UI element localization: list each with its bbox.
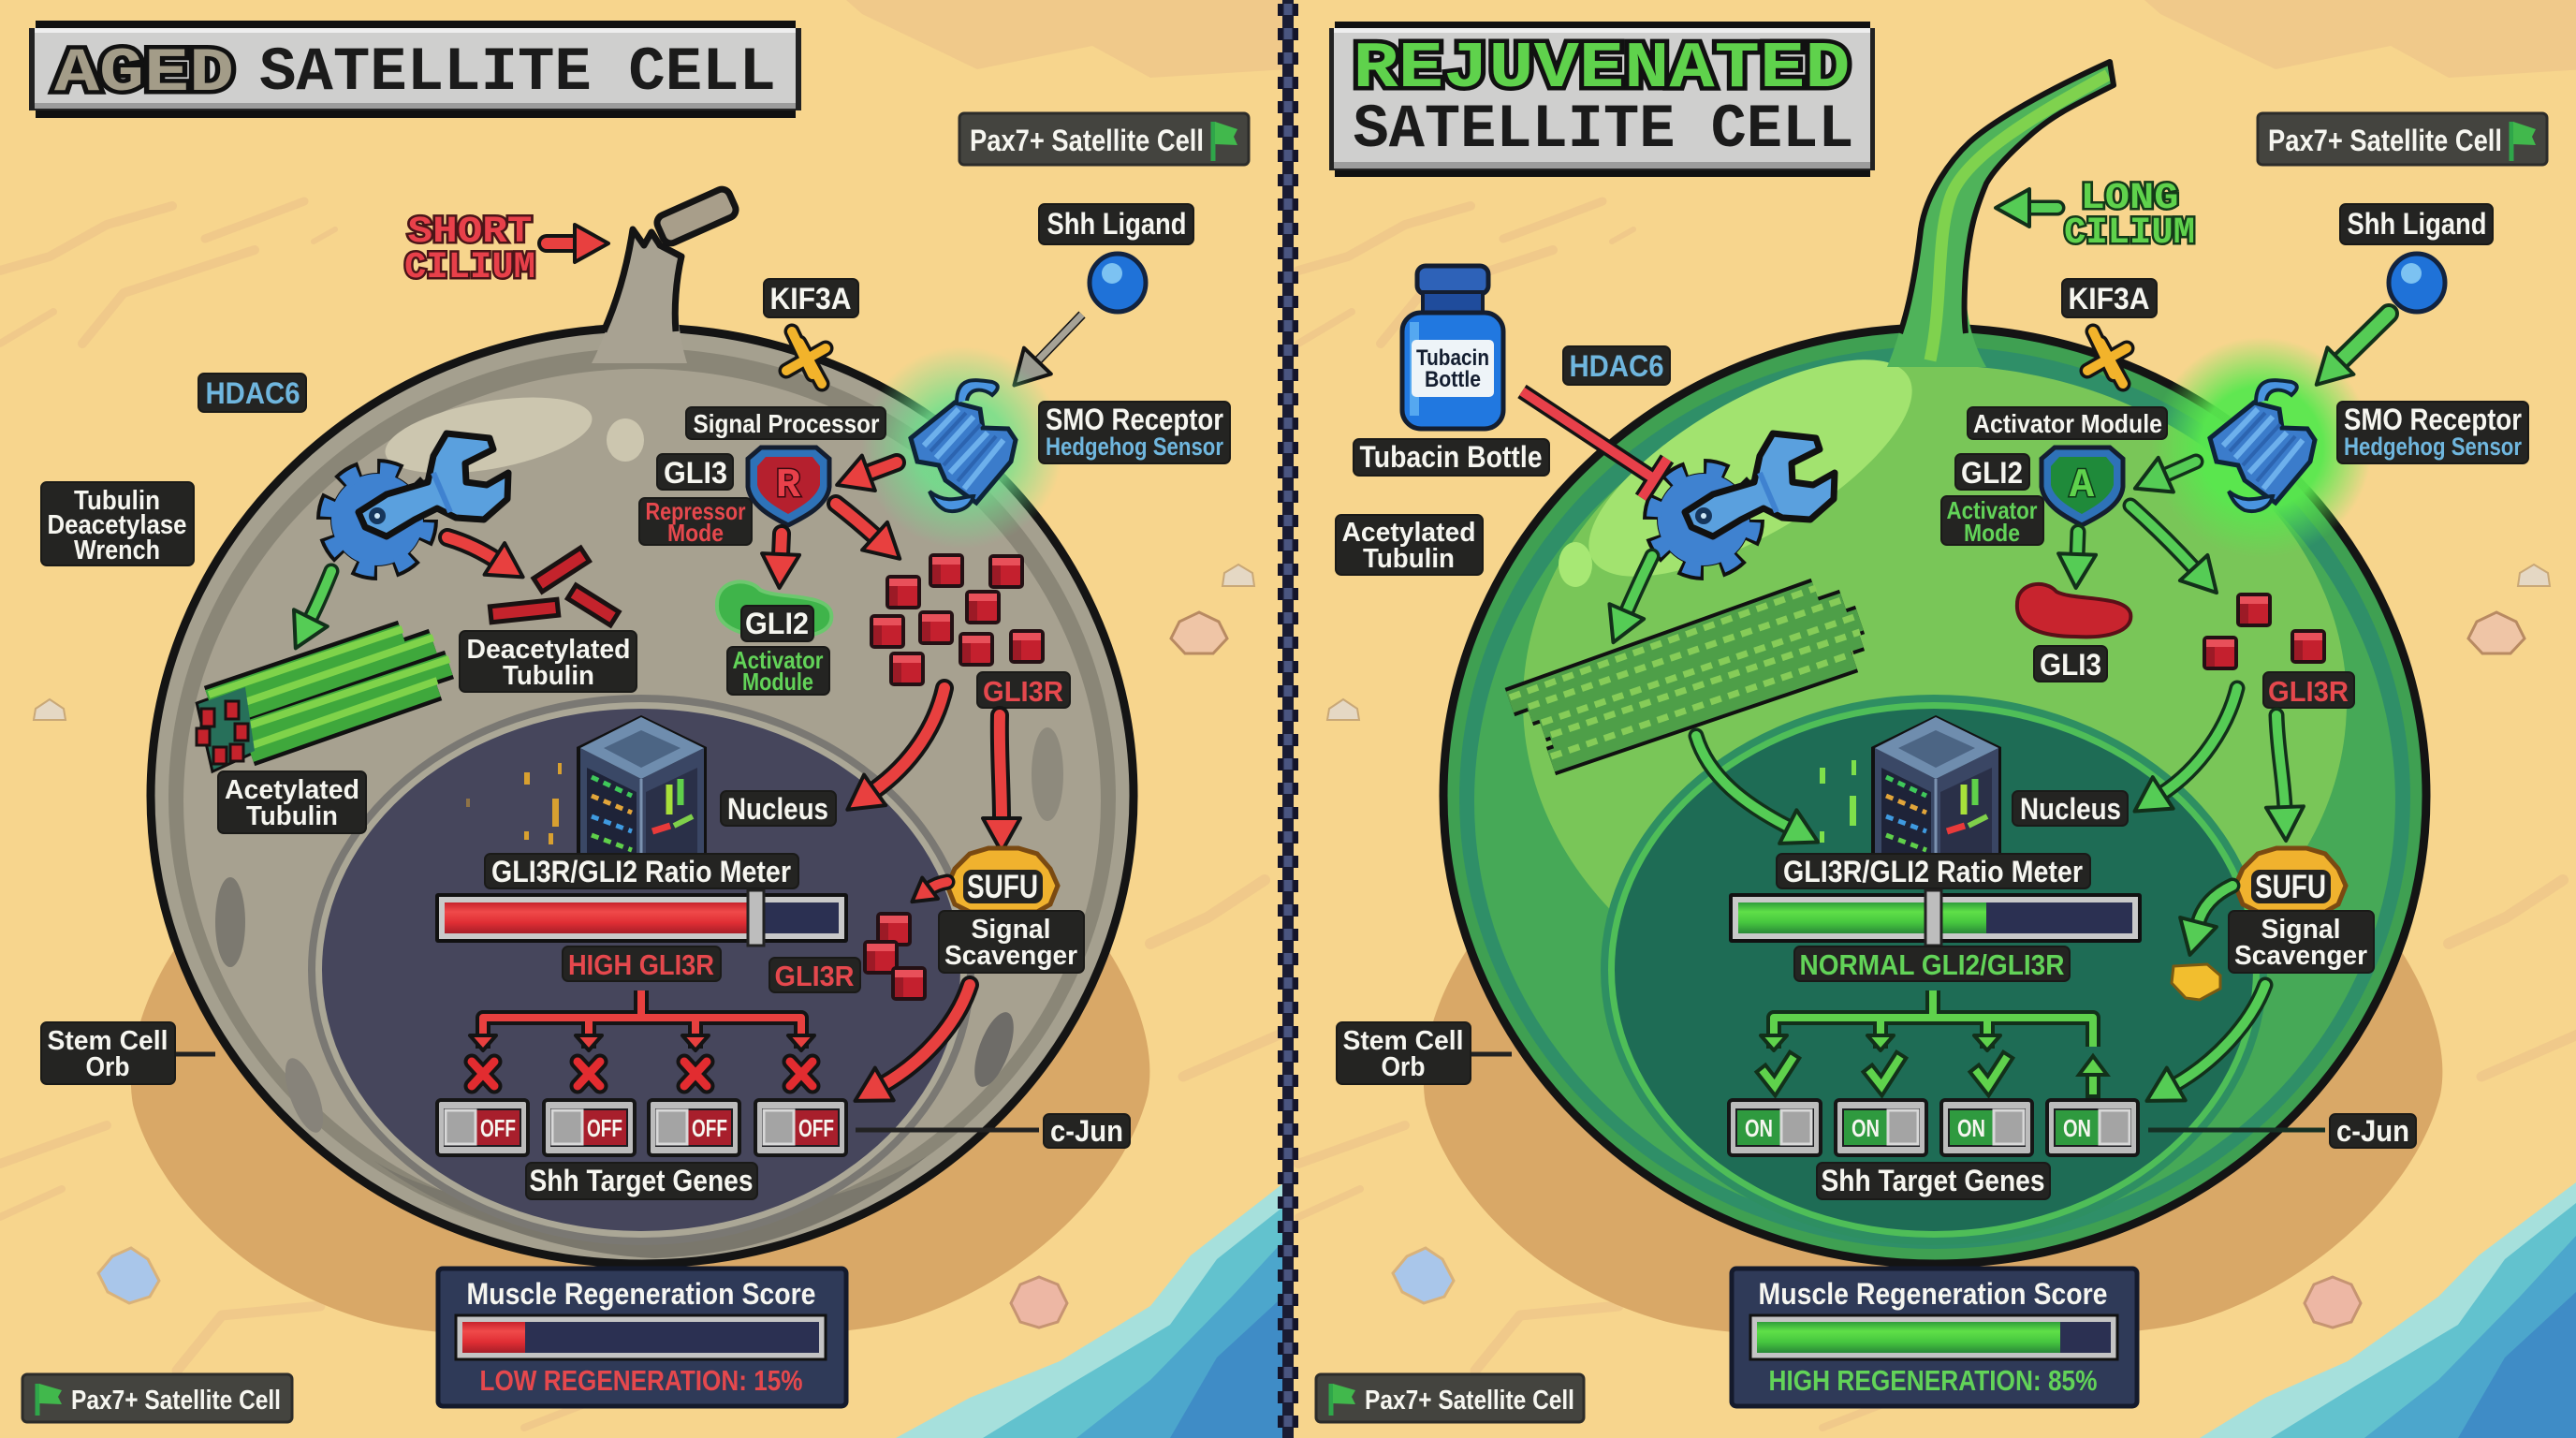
activator mode label: Mode [1964, 519, 2020, 547]
arrow: wrench to acetylated bundle [1626, 556, 1652, 613]
arrow: GLI3R to nucleus [873, 688, 944, 791]
branching repressor arrows [470, 990, 814, 1050]
cell shadow [131, 899, 1149, 1341]
SMO receptor label [1039, 402, 1230, 463]
Pax7 badge bottom: Pax7+ Satellite Cell [71, 1386, 281, 1416]
deacetylated tubulin label [460, 631, 637, 692]
GLI2 label: GLI2 [1961, 456, 2023, 490]
icon: activator shield: A [2070, 462, 2095, 509]
short cilium label: SHORT [408, 212, 532, 254]
shells on sand [1327, 565, 2550, 1328]
c-Jun leader and label: c-Jun [1050, 1114, 1123, 1148]
acetylated tubulin label: Tubulin [1363, 544, 1455, 574]
activator module label [727, 646, 829, 696]
long cilium [1887, 62, 2114, 367]
gene switch ON 3: ON [1957, 1114, 1985, 1142]
nucleus [308, 695, 974, 1245]
arrow: ligand to receptor [2339, 314, 2389, 362]
gene switch OFF 4 [755, 1100, 846, 1155]
captured GLI3R cubes [865, 914, 925, 999]
arrow: SUFU to gold blob [2198, 886, 2232, 924]
deacetylated tubulin label: Deacetylated [466, 635, 631, 665]
SMO receptor label: SMO Receptor [2344, 403, 2522, 436]
Pax7 badge bottom: Pax7+ Satellite Cell [1365, 1386, 1574, 1416]
Shh ligand label: Shh Ligand [2348, 207, 2486, 241]
SMO receptor label: SMO Receptor [1046, 403, 1223, 436]
GLI3R repressor cubes [871, 555, 1043, 684]
high GLI3R status: HIGH GLI3R [568, 948, 714, 981]
tubulin deacetylase wrench label: Tubulin [74, 486, 160, 516]
SMO receptor label [2337, 402, 2528, 463]
icon: SMO receptor glow [2151, 337, 2372, 558]
panel: rejuvenated satellite cell [1316, 22, 2550, 1422]
stem cell orb label: Orb [1382, 1052, 1425, 1082]
gene switch ON 1: ON [1745, 1114, 1773, 1142]
icon: activator shield [2042, 448, 2123, 525]
tubacin bottle label: Tubacin Bottle [1359, 440, 1543, 474]
signal scavenger label: Signal [972, 915, 1050, 945]
title: aged satellite cell [29, 21, 801, 118]
icon: nucleus server tower [1871, 715, 2001, 856]
GLI3R label: GLI3R [2268, 675, 2349, 708]
muscle regeneration score panel: high: Muscle Regeneration Score [1758, 1277, 2108, 1311]
acetylated tubulin label: Acetylated [225, 775, 359, 805]
cell shadow [1424, 899, 2442, 1341]
blocked marks [472, 1062, 812, 1086]
KIF3A label: KIF3A [2069, 282, 2149, 315]
SUFU badge [947, 848, 1058, 912]
GLI3 label: GLI3 [2040, 648, 2101, 682]
icon: gear wrench (HDAC6) [1654, 433, 1835, 569]
check marks and up arrow [1764, 1056, 2107, 1091]
deacetylated tubulin fragments [490, 548, 619, 625]
server sparks [466, 763, 562, 844]
acetylated tubulin bundle [1510, 588, 1860, 761]
Shh ligand label: Shh Ligand [1046, 207, 1187, 241]
icon: tubacin bottle: Bottle [1425, 367, 1481, 392]
water: right shore [2200, 1182, 2576, 1438]
arrow: shield to GLI2 [781, 534, 782, 556]
gene switch OFF 2 [544, 1100, 635, 1155]
title: rejuvenated satellite cell: SATELLITE CELL [1354, 95, 1853, 165]
icon: KIF3A motor [786, 331, 826, 384]
ratio meter label: GLI3R/GLI2 Ratio Meter [1783, 855, 2083, 888]
branching activator arrows [1761, 990, 2093, 1050]
arrow: shield to GLI3R cubes [836, 504, 876, 537]
activator module label: Module [742, 668, 813, 696]
Pax7 badge: Pax7+ Satellite Cell [2268, 124, 2502, 157]
nucleus label: Nucleus [727, 792, 828, 826]
icon: Shh ligand ball [2389, 254, 2445, 312]
arrow: to short cilium [547, 234, 577, 253]
icon: repressor shield [748, 448, 829, 525]
arrow: to long cilium [2027, 200, 2057, 215]
ratio meter: normal [1729, 890, 2142, 946]
icon: KIF3A motor [2087, 331, 2127, 384]
signal scavenger label [2229, 911, 2374, 973]
muscle regeneration score panel: low: LOW REGENERATION: 15% [479, 1364, 803, 1397]
SUFU badge: SUFU [2255, 869, 2326, 905]
HDAC6 label: HDAC6 [1569, 349, 1664, 383]
GLI2 label: GLI2 [745, 607, 809, 640]
gene switch OFF 1: OFF [480, 1114, 516, 1142]
GLI3R label near SUFU: GLI3R [775, 960, 854, 992]
icon: tubacin bottle [1402, 266, 1503, 429]
gene switch OFF 1 [437, 1100, 528, 1155]
activator mode label: Activator [1947, 496, 2037, 524]
Pax7 badge: Pax7+ Satellite Cell [970, 124, 1204, 157]
long cilium label: LONG [2080, 178, 2179, 220]
arrow: GLI3R to SUFU [2276, 715, 2285, 809]
repressor mode label: Repressor [646, 497, 745, 525]
arrow: GLI3R to nucleus [2161, 688, 2237, 794]
Pax7 badge bottom [1316, 1374, 1584, 1422]
deacetylated tubulin label: Tubulin [503, 661, 594, 691]
inhibition line from tubacin [1522, 391, 1667, 498]
arrow: faded ligand to receptor [1036, 315, 1082, 362]
acetylated tubulin label: Tubulin [246, 801, 338, 831]
ratio meter label: GLI3R/GLI2 Ratio Meter [491, 855, 791, 888]
icon: gear wrench (HDAC6) [328, 433, 508, 569]
arrow: scavenger to c-Jun switch [883, 985, 970, 1085]
arrow: bundle to nucleus server [1696, 736, 1790, 828]
repressor mode label [639, 497, 752, 547]
stem cell orb: rejuvenated [1443, 318, 2426, 1264]
tubulin deacetylase wrench label: Deacetylase [47, 510, 187, 540]
gene switch ON 2: ON [1852, 1114, 1880, 1142]
panel: aged satellite cell [22, 21, 1254, 1422]
arrow: shield to GLI3 [2077, 532, 2078, 556]
c-Jun leader and label [856, 1114, 1130, 1148]
icon: repressor shield: R [776, 462, 801, 509]
signal scavenger label: Signal [2261, 915, 2340, 945]
GLI3R cubes [2204, 594, 2324, 668]
gene switch ON 4 [2047, 1100, 2138, 1155]
acetylated tubulin label [218, 771, 366, 833]
icon: nucleus server tower [577, 715, 707, 856]
activator module label: Activator Module [1973, 409, 2162, 438]
broken short cilium [592, 186, 739, 363]
GLI3 label: GLI3 [664, 456, 727, 490]
Pax7 badge bottom [22, 1374, 292, 1422]
server sparks [1820, 760, 1856, 843]
SMO receptor label: Hedgehog Sensor [1046, 433, 1223, 461]
muscle regeneration score panel: high: HIGH REGENERATION: 85% [1769, 1364, 2097, 1397]
arrow: scavenger to c-Jun switch [2174, 985, 2265, 1085]
Shh target genes label: Shh Target Genes [530, 1164, 753, 1197]
long cilium label: CILIUM [2064, 213, 2195, 255]
stem cell orb label: Stem Cell [1342, 1026, 1464, 1056]
repressor mode label: Mode [667, 519, 724, 547]
arrow: GLI3R to SUFU [1000, 715, 1002, 820]
arrow: shield to GLI3R cubes [2130, 506, 2195, 569]
icon: SMO receptor [2210, 380, 2315, 511]
Shh target genes label: Shh Target Genes [1822, 1164, 2044, 1197]
muscle regeneration score panel: low [438, 1269, 846, 1406]
SUFU badge [2235, 848, 2346, 912]
gene switch ON 3 [1941, 1100, 2032, 1155]
stem cell orb label [1337, 1022, 1512, 1084]
title: rejuvenated satellite cell [1329, 22, 1875, 177]
gene switch ON 4: ON [2063, 1114, 2091, 1142]
arrow: SMO to GLI2 shield [2164, 462, 2196, 476]
gene switch ON 1 [1729, 1100, 1821, 1155]
signal scavenger label: Scavenger [2234, 941, 2367, 971]
GLI3 blob [2017, 584, 2130, 637]
KIF3A label: KIF3A [769, 282, 852, 315]
gene switch ON 2 [1836, 1100, 1926, 1155]
arrow: SMO to GLI3 shield [867, 462, 897, 474]
c-Jun leader and label: c-Jun [2336, 1114, 2409, 1148]
title: rejuvenated satellite cell: REJUVENATED [1354, 33, 1850, 107]
arrow: wrench to acetylated tubulin [310, 571, 331, 620]
tubulin deacetylase wrench label: Wrench [74, 536, 160, 565]
signal scavenger label: Scavenger [944, 941, 1077, 971]
GLI2 activator blob [717, 581, 831, 641]
signal scavenger label [939, 911, 1084, 973]
short cilium label [404, 212, 535, 289]
normal ratio status: NORMAL GLI2/GLI3R [1799, 948, 2065, 981]
nucleus label: Nucleus [2020, 792, 2121, 826]
Pax7 badge [2258, 113, 2547, 165]
signal processor label: Signal Processor [693, 409, 880, 438]
divider [1278, 0, 1298, 1438]
stem cell orb: aged [151, 328, 1134, 1264]
acetylated tubulin bundle [197, 629, 449, 770]
long cilium label [2064, 178, 2195, 255]
activator module label: Activator [732, 646, 824, 674]
acetylated tubulin label [1336, 515, 1483, 575]
muscle regeneration score panel: high [1732, 1269, 2137, 1406]
title: aged satellite cell: SATELLITE CELL [259, 37, 776, 108]
nucleus [1601, 695, 2267, 1245]
HDAC6 label: HDAC6 [206, 376, 300, 410]
activator mode label [1941, 496, 2043, 547]
icon: SMO receptor [861, 346, 1063, 549]
tubulin deacetylase wrench label [41, 482, 194, 565]
c-Jun leader and label [2148, 1114, 2416, 1148]
SMO receptor label: Hedgehog Sensor [2344, 433, 2522, 461]
stem cell orb label [41, 1022, 215, 1084]
gene switch OFF 3: OFF [692, 1114, 727, 1142]
icon: tubacin bottle: Tubacin [1416, 345, 1489, 371]
stem cell orb label: Orb [86, 1052, 129, 1082]
arrow: wrench to deacetylated tubulin [447, 537, 496, 560]
ratio meter: high GLI3R [435, 890, 848, 946]
muscle regeneration score panel: low: Muscle Regeneration Score [466, 1277, 816, 1311]
gene switch OFF 2: OFF [587, 1114, 622, 1142]
gene switch OFF 3 [649, 1100, 739, 1155]
acetylated tubulin label: Acetylated [1342, 518, 1475, 548]
degraded GLI3R gold blob [2172, 964, 2220, 1000]
SUFU badge: SUFU [967, 869, 1038, 905]
water: left shore [896, 1180, 1288, 1438]
arrow: SUFU to captured GLI3R [929, 882, 947, 889]
title: aged satellite cell: AGED [54, 38, 234, 109]
Pax7 badge [959, 113, 1249, 165]
shells on sand [34, 565, 1254, 1328]
stem cell orb label: Stem Cell [47, 1026, 168, 1056]
GLI3R label: GLI3R [983, 675, 1063, 708]
short cilium label: CILIUM [404, 247, 535, 289]
gene switch OFF 4: OFF [798, 1114, 834, 1142]
icon: Shh ligand ball [1090, 254, 1146, 312]
